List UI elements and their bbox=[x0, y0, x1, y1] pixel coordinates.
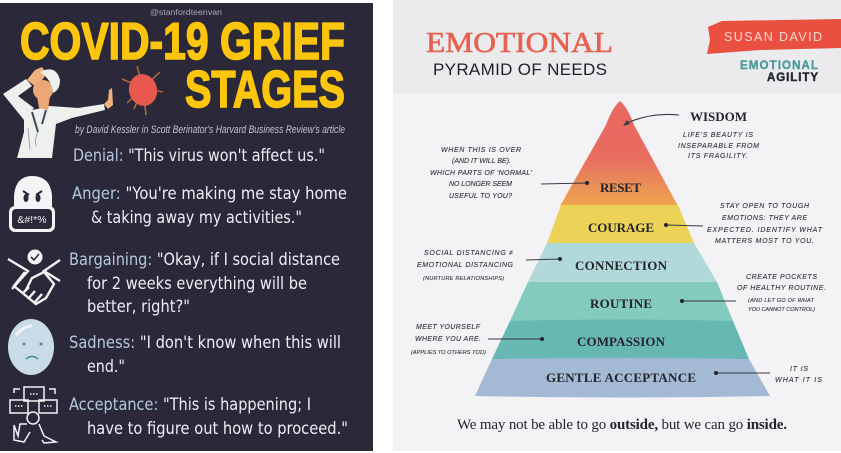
layer: connection bbox=[528, 243, 717, 282]
title: COVID-19 GRIEF bbox=[20, 13, 345, 71]
note: courage: STAY OPEN TO TOUGH bbox=[720, 203, 810, 210]
text: wisdom bbox=[678, 109, 759, 160]
arrow: courage bbox=[664, 223, 703, 227]
note: reset: WHICH PARTS OF 'NORMAL' bbox=[430, 170, 533, 177]
icon: anger mask: &#!*% bbox=[17, 214, 47, 226]
layer: compassion bbox=[492, 320, 749, 359]
icon: anger mask bbox=[9, 176, 55, 232]
arrow: gentle acceptance bbox=[714, 371, 770, 375]
layer: routine: ROUTINE bbox=[590, 296, 652, 311]
text: wisdom: LIFE'S BEAUTY IS bbox=[683, 132, 753, 139]
panel: emotional pyramid of needs bbox=[393, 0, 841, 451]
note: routine: OF HEALTHY ROUTINE. bbox=[737, 285, 826, 292]
note: reset: USEFUL TO YOU? bbox=[449, 193, 512, 200]
text: anger: & taking away my activities." bbox=[91, 208, 302, 227]
text: wisdom: INSEPARABLE FROM bbox=[678, 143, 759, 150]
text: acceptance: have to figure out how to proceed." bbox=[87, 419, 348, 438]
layer: connection: CONNECTION bbox=[575, 258, 668, 273]
note: courage: EMOTIONS: THEY ARE bbox=[722, 215, 807, 222]
text: anger bbox=[72, 184, 347, 227]
logo: emotional agility bbox=[740, 60, 818, 84]
text: wisdom: ITS FRAGILITY. bbox=[688, 153, 748, 160]
icon: virus bbox=[122, 66, 163, 115]
text: anger: Anger: "You're making me stay home bbox=[72, 184, 347, 203]
text: sadness: Sadness: "I don't know when this will bbox=[69, 333, 341, 352]
note: gentle acceptance bbox=[775, 366, 822, 384]
icon: sad face bbox=[8, 319, 54, 375]
text: sadness: end." bbox=[87, 357, 125, 376]
layer: courage: COURAGE bbox=[588, 220, 654, 235]
note: connection: (NURTURE RELATIONSHIPS) bbox=[423, 276, 504, 282]
closing line: We may not be able to go outside, but we can go inside. bbox=[457, 417, 787, 433]
arrow: wisdom bbox=[623, 114, 679, 126]
note: compassion: (APPLIES TO OTHERS TOO) bbox=[411, 350, 486, 356]
text: sadness bbox=[69, 333, 341, 376]
arrow: compassion bbox=[488, 337, 544, 341]
icon: handshake bbox=[8, 250, 60, 304]
icon: person with speech bubbles bbox=[10, 387, 57, 443]
note: reset bbox=[430, 147, 533, 200]
note: courage bbox=[707, 203, 823, 245]
title: PYRAMID OF NEEDS bbox=[433, 60, 607, 79]
arrow: connection bbox=[526, 257, 562, 261]
banner: susan david: SUSAN DAVID bbox=[724, 30, 822, 44]
note: connection: SOCIAL DISTANCING ≠ bbox=[424, 250, 513, 257]
note: compassion: MEET YOURSELF bbox=[416, 324, 481, 331]
layer: gentle acceptance: GENTLE ACCEPTANCE bbox=[546, 370, 696, 385]
note: gentle acceptance: IT IS bbox=[790, 366, 808, 373]
arrow: reset bbox=[541, 181, 589, 185]
pyramid chart bbox=[475, 101, 770, 398]
title: EMOTIONAL bbox=[426, 28, 613, 59]
note: connection: EMOTIONAL DISTANCING bbox=[417, 262, 514, 269]
text: acceptance bbox=[69, 395, 348, 438]
layer: routine bbox=[510, 282, 733, 321]
note: courage: MATTERS MOST TO YOU. bbox=[715, 238, 814, 245]
banner: susan david bbox=[707, 19, 841, 54]
layer: courage bbox=[547, 205, 694, 243]
illustration: doctor bbox=[3, 67, 113, 158]
byline: by David Kessler in Scott Berinator's Harvard Business Review's article bbox=[75, 124, 345, 136]
title bbox=[20, 13, 345, 119]
layer: wisdom and reset: RESET bbox=[600, 180, 641, 195]
note: connection bbox=[417, 250, 514, 282]
panel: covid-19 grief stages bbox=[0, 3, 373, 451]
text: acceptance: Acceptance: "This is happening; I bbox=[69, 395, 311, 414]
logo: emotional agility: AGILITY bbox=[767, 72, 818, 84]
note: courage: EXPECTED. IDENTIFY WHAT bbox=[707, 227, 823, 234]
layer: compassion: COMPASSION bbox=[577, 334, 666, 349]
title: STAGES bbox=[185, 61, 345, 119]
text: bargaining: better, right?" bbox=[87, 297, 190, 316]
note: routine: CREATE POCKETS bbox=[746, 274, 817, 281]
note: routine: YOU CANNOT CONTROL) bbox=[748, 307, 815, 313]
note: reset: NO LONGER SEEM bbox=[449, 181, 512, 188]
text: bargaining: Bargaining: "Okay, if I social distance bbox=[69, 250, 340, 269]
title bbox=[426, 28, 613, 79]
note: routine bbox=[737, 274, 826, 313]
layer: wisdom and reset bbox=[560, 101, 678, 206]
text: wisdom: WISDOM bbox=[690, 109, 747, 124]
note: routine: (AND LET GO OF WHAT bbox=[748, 298, 815, 304]
text: denial: Denial: "This virus won't affect us." bbox=[73, 146, 325, 165]
handle: @stanfordteenvan bbox=[150, 8, 222, 17]
note: compassion: WHERE YOU ARE. bbox=[415, 336, 481, 343]
logo: emotional agility: EMOTIONAL bbox=[740, 60, 818, 72]
arrow: routine bbox=[680, 299, 736, 303]
note: gentle acceptance: WHAT IT IS bbox=[775, 377, 822, 384]
layer: gentle acceptance bbox=[475, 358, 770, 398]
text: bargaining bbox=[69, 250, 340, 316]
note: reset: (AND IT WILL BE). bbox=[452, 158, 511, 165]
note: compassion bbox=[411, 324, 486, 356]
text: bargaining: for 2 weeks everything will be bbox=[87, 274, 307, 293]
note: reset: WHEN THIS IS OVER bbox=[441, 147, 521, 154]
